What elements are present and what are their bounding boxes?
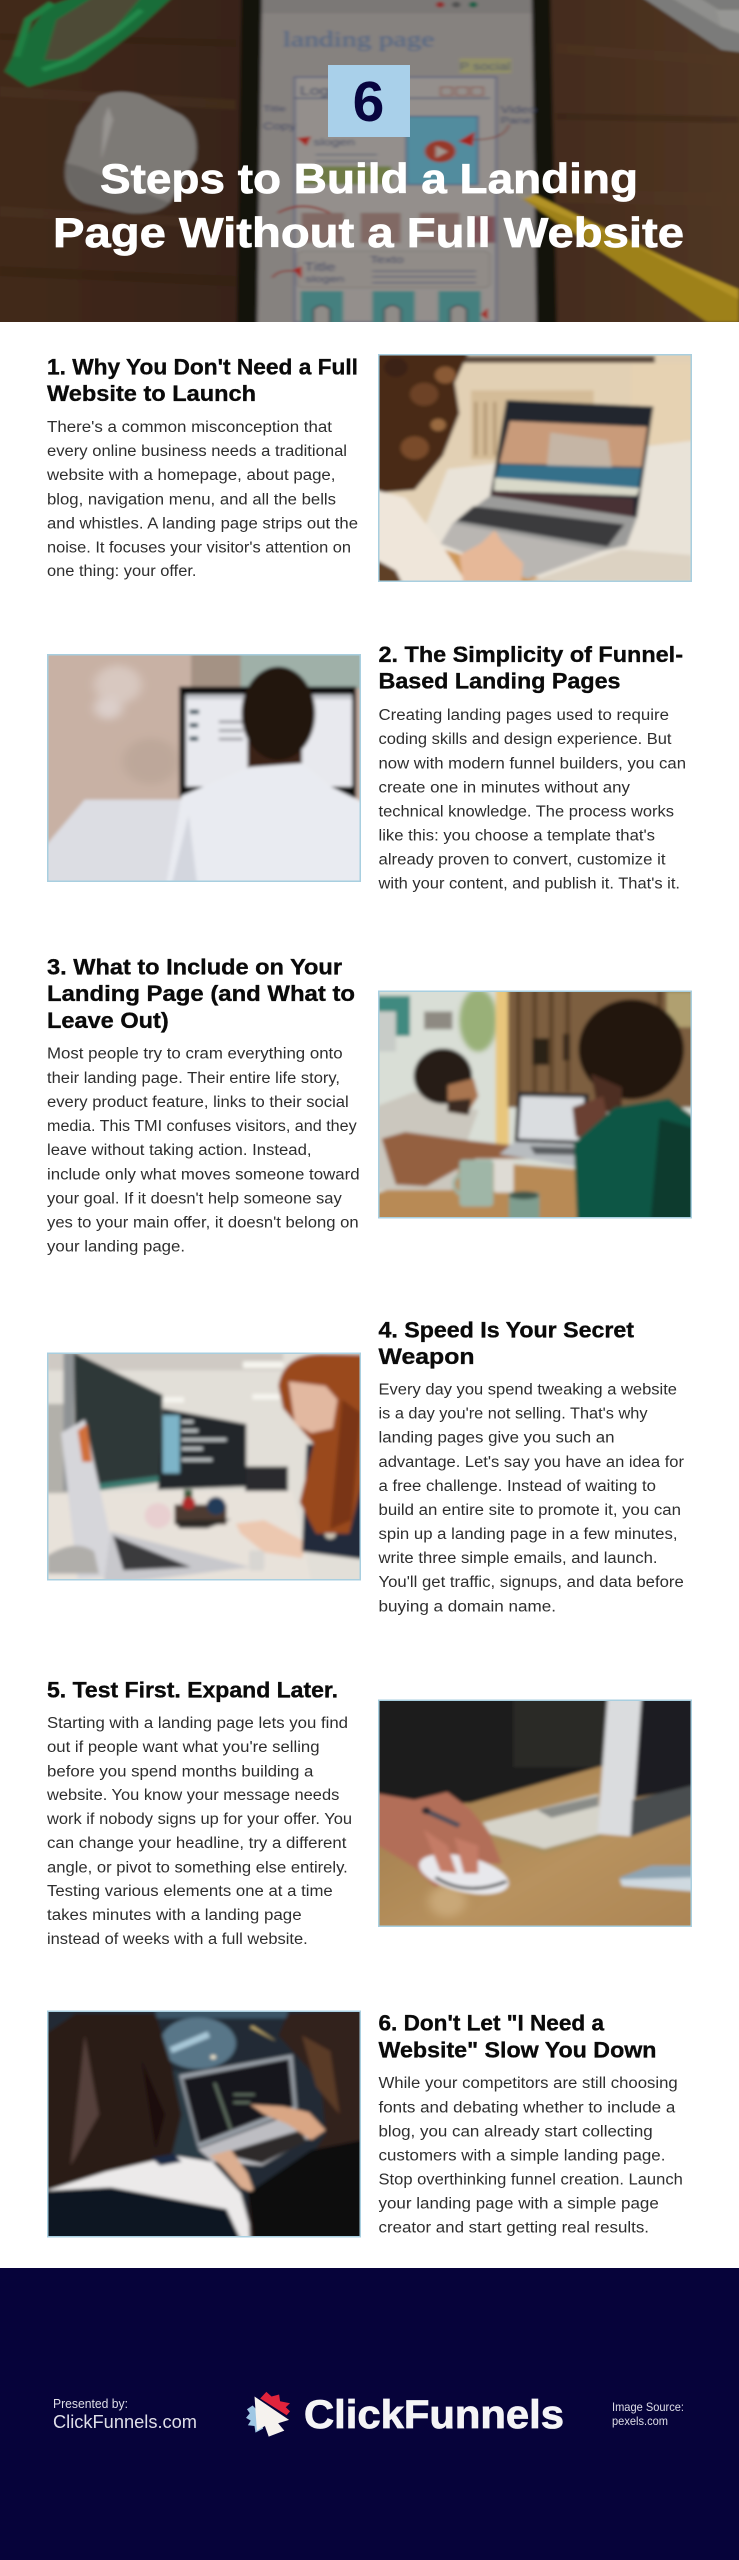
body text 6: your landing page with a simple page [378,2195,659,2212]
hero photo: tablet with landing page sketch: Copy [263,121,297,132]
heading 2: Based Landing Pages [378,669,620,694]
main title: Steps to Build a Landing [100,155,638,202]
presented by credit [53,2396,197,2432]
heading 2 [378,642,683,694]
body text 2: like this: you choose a template that's [378,827,655,844]
hero photo: tablet with landing page sketch: Log [300,84,330,98]
body text 1: noise. It focuses your visitor's attention on [47,540,351,557]
body text 4: You'll get traffic, signups, and data before [378,1574,684,1591]
body text 1: website with a homepage, about page, [46,467,335,484]
body text 3: include only what moves someone toward [47,1166,360,1183]
main title [53,155,684,256]
heading 3: Leave Out) [47,1008,169,1033]
body text 6 [378,2075,683,2236]
body text 4: Every day you spend tweaking a website [378,1382,677,1398]
body text 5: out if people want what you're selling [47,1739,320,1756]
image source credit [612,2400,684,2428]
body text 1: every online business needs a traditional [47,443,347,460]
number badge: 6 [353,70,384,134]
section 2 [38,642,686,893]
photo 1: laptop on table [378,354,692,582]
body text 6: creator and start getting real results. [378,2220,649,2236]
body text 3 [47,1046,360,1256]
body text 3: Most people try to cram everything onto [47,1046,343,1063]
body text 2: now with modern funnel builders, you can [378,755,686,772]
heading 6 [378,2010,656,2062]
body text 4: landing pages give you such an [378,1430,614,1447]
body text 6: blog, you can already start collecting [378,2123,653,2140]
hero photo: tablet with landing page sketch: Title [304,261,335,274]
hero header panel [0,0,739,329]
body text 1 [46,419,358,580]
body text 5: instead of weeks with a full website. [47,1931,308,1948]
body text 3: yes to your main offer, it doesn't belong on [47,1214,359,1232]
body text 5: can change your headline, try a different [47,1835,347,1852]
hero photo: tablet with landing page sketch: slogen [313,137,355,148]
body text 2: Creating landing pages used to require [378,707,669,724]
body text 2: coding skills and design experience. But [378,731,672,748]
body text 4: advantage. Let's say you have an idea for [378,1454,684,1471]
body text 5 [46,1715,352,1948]
body text 6: Stop overthinking funnel creation. Launch [378,2171,683,2188]
body text 5: website. You know your message needs [46,1787,340,1804]
body text 6: fonts and debating whether to include a [378,2099,676,2116]
presented by credit: Presented by: [53,2396,128,2411]
ClickFunnels wordmark: ClickFunnels [304,2393,564,2437]
hero photo: tablet with landing page sketch: Texto [370,254,404,265]
heading 6: Website" Slow You Down [378,2037,656,2062]
hero photo: tablet with landing page sketch: slogen [305,275,344,285]
body text 5: work if nobody signs up for your offer. You [46,1811,352,1828]
section 1 [46,346,702,592]
body text 2: create one in minutes without any [378,780,630,796]
photo 5: hand on mouse at desk [378,1700,692,1927]
icon: ClickFunnels logo mark [246,2392,290,2437]
hero photo: tablet with landing page sketch: Video [501,104,537,116]
heading 1 [47,354,358,406]
body text 5: Starting with a landing page lets you find [47,1715,348,1732]
hero photo: tablet with landing page sketch [0,0,739,322]
body text 3: your goal. If it doesn't help someone say [47,1190,342,1207]
body text 5: takes minutes with a landing page [47,1907,302,1924]
body text 4: a free challenge. Instead of waiting to [378,1478,656,1495]
body text 4: buying a domain name. [378,1598,556,1615]
heading 1: 1. Why You Don't Need a Full [47,354,358,380]
heading 2: 2. The Simplicity of Funnel- [378,642,683,667]
section 5 [46,1677,702,1948]
body text 5: before you spend months building a [47,1763,314,1780]
heading 6: 6. Don't Let "I Need a [378,2010,604,2036]
body text 6: While your competitors are still choosing [378,2075,678,2092]
section 4 [38,1317,684,1615]
body text 3: your landing page. [47,1239,185,1256]
heading 3: 3. What to Include on Your [47,954,342,979]
body text 4: write three simple emails, and launch. [377,1550,658,1567]
body text 4: is a day you're not selling. That's why [378,1406,648,1423]
body text 2: technical knowledge. The process works [378,804,674,821]
body text 3: their landing page. Their entire life story, [47,1070,340,1087]
body text 1: There's a common misconception that [47,419,333,436]
body text 2 [377,707,686,893]
body text 3: every product feature, links to their social [47,1094,349,1111]
section 6 [38,2003,683,2245]
body text 5: Testing various elements one at a time [47,1883,333,1900]
body text 6: customers with a simple landing page. [378,2148,665,2164]
hero photo: tablet with landing page sketch: Pane [501,116,531,126]
heading 5: 5. Test First. Expand Later. [47,1677,338,1702]
heading 1: Website to Launch [47,381,256,406]
hero photo: tablet with landing page sketch: landing page [283,27,435,51]
hero photo: tablet with landing page sketch: Title [263,104,286,114]
section 3 [47,954,702,1256]
presented by credit: ClickFunnels.com [53,2411,197,2432]
photo 6: two women at a laptop [47,2010,361,2238]
body text 3: media. This TMI confuses visitors, and they [47,1118,357,1135]
photo 3: two people with laptop at table [378,990,692,1218]
heading 3 [47,954,355,1033]
image source credit: Image Source: [612,2400,684,2414]
body text 5: angle, or pivot to something else entirely. [47,1859,348,1876]
hero photo: tablet with landing page sketch: P social [460,59,510,72]
photo 2: man at monitor from behind [47,654,361,882]
photo 4: red-haired woman coding [47,1352,361,1580]
body text 1: blog, navigation menu, and all the bells [47,491,336,508]
heading 4 [378,1317,635,1369]
body text 4: spin up a landing page in a few minutes, [378,1526,678,1543]
body text 4 [377,1382,684,1615]
body text 1: one thing: your offer. [47,563,196,580]
main title: Page Without a Full Website [53,209,684,256]
number badge [328,65,410,137]
body text 3: leave without taking action. Instead, [47,1142,312,1159]
heading 4: 4. Speed Is Your Secret [378,1317,635,1342]
body text 4: build an entire site to promote it, you can [378,1502,681,1519]
footer panel [0,2268,739,2560]
heading 3: Landing Page (and What to [47,981,355,1006]
heading 4: Weapon [378,1344,474,1369]
image source credit: pexels.com [612,2414,668,2428]
body text 1: and whistles. A landing page strips out the [47,516,358,532]
body text 2: already proven to convert, customize it [378,852,666,868]
body text 2: with your content, and publish it. That's it. [377,876,680,893]
